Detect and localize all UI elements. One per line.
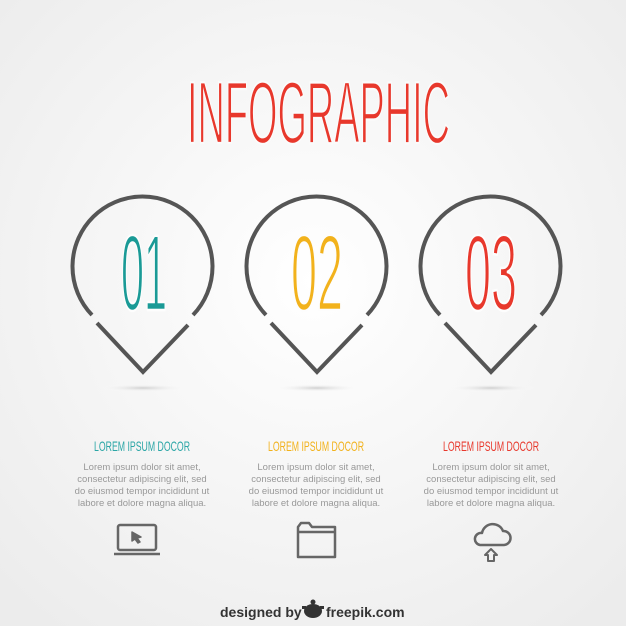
column 3 text <box>424 438 559 509</box>
icon: cloud upload <box>475 524 511 561</box>
column 1 text: labore et dolore magna aliqua. <box>78 498 206 509</box>
icon: folder <box>298 523 335 557</box>
column 3 text: Lorem ipsum dolor sit amet, <box>432 462 550 473</box>
pin 2 <box>246 197 387 392</box>
icon: freepik logo <box>302 600 324 618</box>
pin 3: 03 <box>465 212 517 333</box>
column 1 text: do eiusmod tempor incididunt ut <box>75 486 210 497</box>
icon: laptop <box>114 525 160 554</box>
column 3 text: consectetur adipiscing elit, sed <box>426 474 556 485</box>
column 2 text: labore et dolore magna aliqua. <box>252 498 380 509</box>
column 2 text <box>249 438 384 509</box>
column 3 text: labore et dolore magna aliqua. <box>427 498 555 509</box>
footer credit: designed by <box>220 604 302 620</box>
column 3 text: LOREM IPSUM DOCOR <box>443 438 539 454</box>
column 1 text: consectetur adipiscing elit, sed <box>77 474 207 485</box>
column 1 text <box>75 438 210 509</box>
pin 2: 02 <box>291 212 343 333</box>
column 2 text: do eiusmod tempor incididunt ut <box>249 486 384 497</box>
column 3 text: do eiusmod tempor incididunt ut <box>424 486 559 497</box>
column 2 text: LOREM IPSUM DOCOR <box>268 438 364 454</box>
column 1 text: LOREM IPSUM DOCOR <box>94 438 190 454</box>
column 2 text: Lorem ipsum dolor sit amet, <box>257 462 375 473</box>
column 1 text: Lorem ipsum dolor sit amet, <box>83 462 201 473</box>
column 2 text: consectetur adipiscing elit, sed <box>251 474 381 485</box>
footer credit: freepik.com <box>326 604 405 620</box>
pin 3 <box>420 197 560 392</box>
footer credit <box>220 600 405 620</box>
pin 1 <box>72 197 212 392</box>
pin 1: 01 <box>121 212 167 333</box>
